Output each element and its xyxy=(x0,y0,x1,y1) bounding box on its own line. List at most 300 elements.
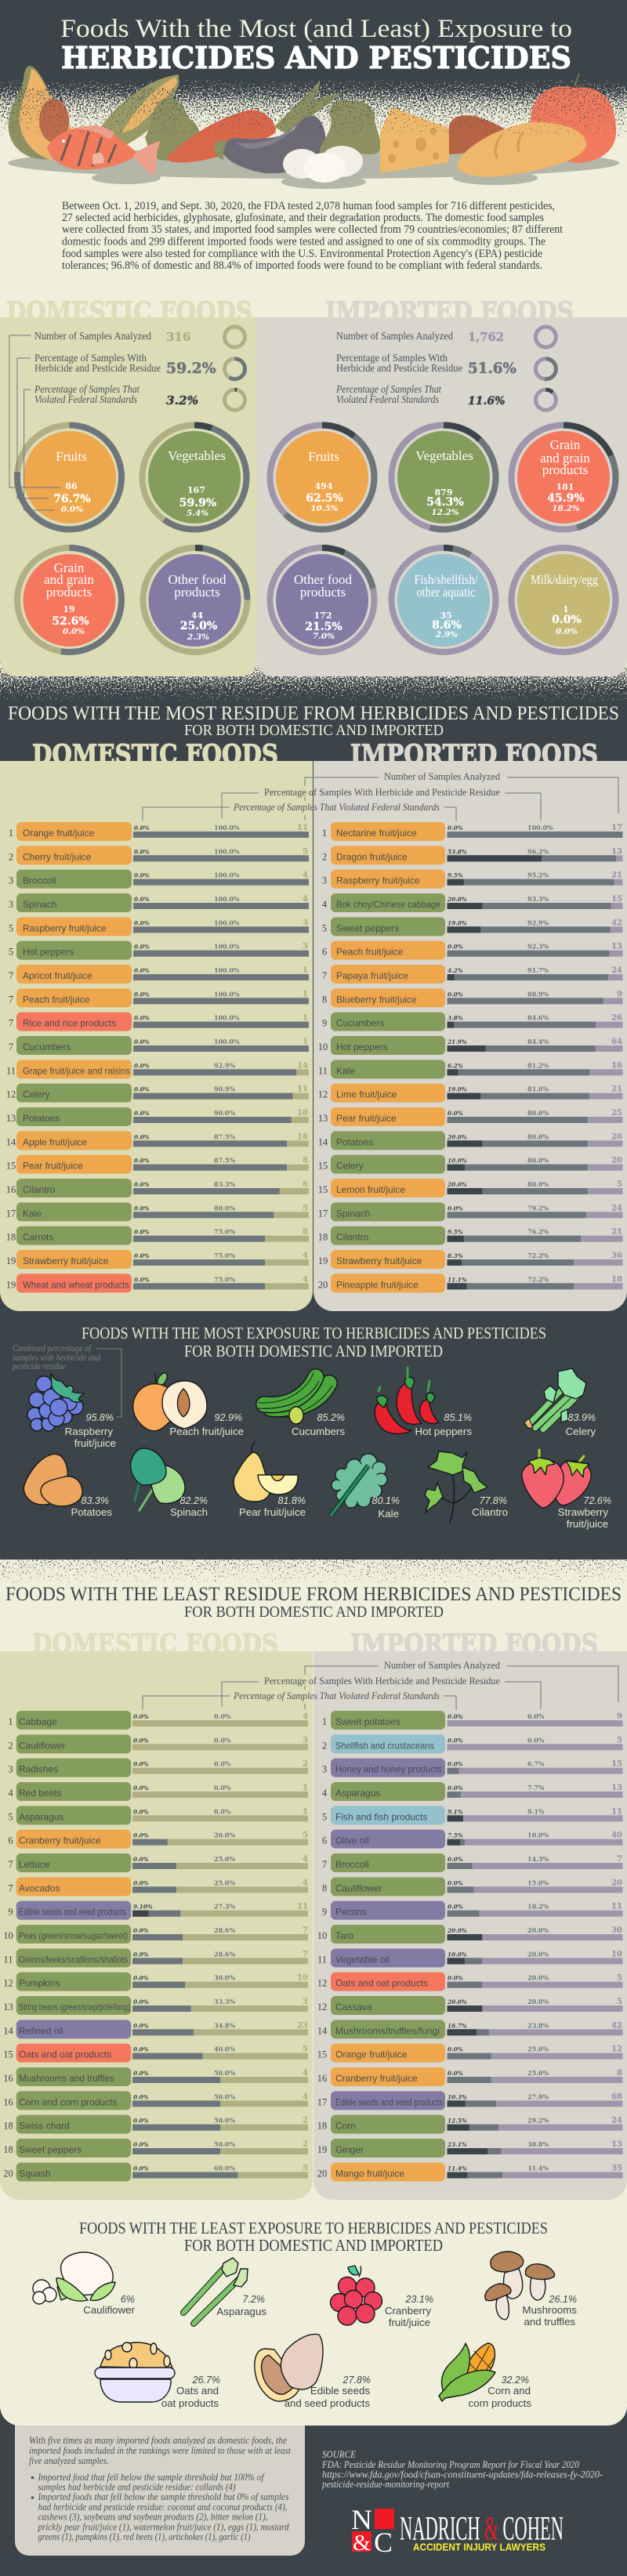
row: Asparagus: 0.0% xyxy=(448,1784,463,1792)
heading: most residue xyxy=(8,703,619,739)
row: Asparagus: 13 xyxy=(611,1784,622,1792)
row: Orange fruit/juice: 12 xyxy=(611,2045,622,2054)
row: Cassava: Cassava xyxy=(335,2002,372,2013)
row: Grape fruit/juice and raisins: 92.9% xyxy=(214,1061,235,1069)
row: Corn and corn products: 0.0% xyxy=(133,2093,149,2100)
row: Asparagus xyxy=(322,1782,622,1801)
item: asparagus xyxy=(183,2258,266,2324)
text block: notes: greens (1), pumpkins (1), red beets (1), artichokes (1), garlic (1) xyxy=(38,2531,251,2542)
row: Mushrooms and truffles: 50.0% xyxy=(214,2069,235,2077)
row: Cauliflower: Cauliflower xyxy=(335,1882,382,1893)
row: Hot peppers: Hot peppers xyxy=(23,947,74,958)
row: Cranberry fruit/juice xyxy=(317,2067,622,2086)
row: Corn: 24 xyxy=(611,2117,622,2125)
item: corn: corn products xyxy=(468,2397,531,2409)
table legend: least residue: Percentage of Samples With Herbicide and Pesticide Residue xyxy=(264,1675,500,1687)
row: Pear fruit/juice: 8 xyxy=(303,1157,308,1165)
row: Shellfish and crustaceans xyxy=(322,1734,622,1753)
panel: least residue domestic background xyxy=(0,1651,313,2200)
item: pear xyxy=(234,1442,306,1518)
row: Spinach: 3 xyxy=(9,899,13,910)
row: Cherry fruit/juice xyxy=(9,846,309,864)
row: Cilantro: 21 xyxy=(611,1228,622,1237)
row: Apricot fruit/juice: 1 xyxy=(303,966,308,975)
row: Cabbage: 0.0% xyxy=(133,1713,149,1720)
circle: imported grain: Grain xyxy=(550,437,581,452)
circle: domestic grain: 0.0% xyxy=(63,627,85,636)
row: Lettuce: 0.0% xyxy=(133,1856,149,1863)
row: Radishes: 0.0% xyxy=(133,1761,149,1768)
row: Sweet peppers: 0.0% xyxy=(133,2141,149,2148)
row: Raspberry fruit/juice: 3 xyxy=(303,918,308,927)
circle: imported vegetables xyxy=(392,425,495,530)
row: Mushrooms/truffles/fungi: 23.8% xyxy=(527,2021,549,2029)
item: asparagus: Asparagus xyxy=(216,2306,266,2317)
row: Cabbage: Cabbage xyxy=(19,1716,57,1727)
row: Cranberry fruit/juice: 8 xyxy=(617,2069,622,2078)
row: Carrots: 8 xyxy=(303,1228,308,1237)
row: Celery: 12 xyxy=(6,1089,16,1100)
row: Pear fruit/juice xyxy=(318,1107,622,1126)
item: potatoes xyxy=(24,1454,112,1518)
circle: imported other food xyxy=(270,548,375,652)
circle: imported vegetables: 879 xyxy=(435,487,452,498)
row: Oats and oat products: 5 xyxy=(617,1974,622,1983)
row: Pear fruit/juice: 0.0% xyxy=(134,1158,150,1165)
circle: imported milk: 1 xyxy=(563,604,569,614)
logo: Nadrich and Cohen: & xyxy=(353,2531,371,2556)
row: Lime fruit/juice: 19.0% xyxy=(448,1086,467,1093)
table: most residue domestic xyxy=(6,822,309,1292)
item: cauliflower: 6% xyxy=(121,2294,135,2305)
row: Carrots xyxy=(6,1226,309,1245)
circle: imported fish: 2.9% xyxy=(435,630,458,639)
row: Edible seeds and seed products: 27.3% xyxy=(214,1903,235,1911)
text block: source xyxy=(321,2449,603,2490)
row: Strawberry fruit/juice: 8.3% xyxy=(448,1252,463,1259)
row: Edible seeds and seed products: Edible seeds and seed products xyxy=(335,2096,443,2107)
icon: strawberry xyxy=(522,1450,591,1508)
row: Cilantro: 16 xyxy=(6,1184,16,1195)
row: Sweet peppers xyxy=(322,917,622,936)
row: Edible seeds and seed products: 68 xyxy=(611,2092,622,2101)
item: hot peppers xyxy=(375,1368,472,1437)
row: Bok choy/Chinese cabbage xyxy=(322,893,622,912)
row: Spinach: 4 xyxy=(303,895,308,904)
circle: imported grain: products xyxy=(542,462,588,477)
table legend: least residue: Percentage of Samples That Violated Federal Standards xyxy=(233,1690,440,1701)
grain transition to cream xyxy=(0,1560,627,1583)
row: Cauliflower: 8 xyxy=(322,1882,327,1893)
row: Taro xyxy=(317,1925,622,1944)
row: Cucumbers: 84.6% xyxy=(527,1014,549,1022)
row: Hot peppers: 5 xyxy=(9,947,13,958)
footer dark background xyxy=(0,2398,627,2576)
intro paragraph xyxy=(62,200,563,272)
item: raspberry: Raspberry xyxy=(65,1426,113,1437)
row: Carrots: 75.0% xyxy=(214,1228,235,1236)
row: Lettuce: 7 xyxy=(8,1859,13,1870)
row: Potatoes: 10 xyxy=(297,1109,308,1118)
row: Onions xyxy=(3,1948,308,1967)
row: Strawberry fruit/juice: Strawberry fruit/juice xyxy=(23,1255,109,1266)
row: Broccoli: Broccoli xyxy=(23,875,56,886)
row: Lettuce xyxy=(8,1853,308,1872)
row: Swiss chard: 0.0% xyxy=(133,2118,149,2125)
item: raspberry: fruit/juice xyxy=(74,1437,116,1449)
row: Hot peppers: 84.4% xyxy=(527,1038,549,1045)
row: Raspberry fruit/juice: 21 xyxy=(611,871,622,880)
row: Sweet potatoes: 0.0% xyxy=(527,1712,545,1720)
panel: notes box xyxy=(15,2398,305,2556)
row: Ginger: 13 xyxy=(611,2140,622,2149)
row: Broccoli xyxy=(9,870,309,889)
row: Orange fruit/juice: 11 xyxy=(297,824,308,832)
row: Sweet peppers: 2 xyxy=(303,2140,308,2149)
legend: imported samples with residue xyxy=(336,353,556,379)
row: Sweet potatoes: Sweet potatoes xyxy=(335,1716,400,1727)
row: Lime fruit/juice: Lime fruit/juice xyxy=(336,1089,397,1100)
row: Wheat and wheat products: Wheat and wheat products xyxy=(23,1279,129,1290)
heading: most exposure: FOODS WITH THE MOST EXPOSURE TO HERBICIDES AND PESTICIDES xyxy=(82,1324,546,1342)
row: Rice and rice products: 0.0% xyxy=(134,1015,150,1022)
item: cranberry: fruit/juice xyxy=(389,2317,430,2328)
table legend: most residue xyxy=(143,770,618,821)
row: Honey and honey products: 0.0% xyxy=(448,1761,463,1768)
row: Cauliflower: Cauliflower xyxy=(19,1740,65,1751)
circle: domestic grain: 19 xyxy=(63,604,75,614)
row: Oats and oat products: 5 xyxy=(303,2045,308,2054)
circle: domestic vegetables: 167 xyxy=(187,485,205,495)
row: Spinach xyxy=(9,893,309,912)
row: Carrots: 0.0% xyxy=(134,1229,150,1236)
row: Strawberry fruit/juice: 36 xyxy=(611,1252,622,1260)
row: Radishes: 2 xyxy=(303,1760,308,1769)
row: Lemon fruit/juice: 80.0% xyxy=(527,1180,549,1188)
row: Taro: 20.0% xyxy=(447,1927,467,1934)
row: Blueberry fruit/juice: 0.0% xyxy=(448,991,463,998)
row: Pecans xyxy=(322,1901,622,1920)
row: Cranberry fruit/juice: Cranberry fruit/juice xyxy=(335,2073,418,2084)
circle: imported other food: products xyxy=(300,585,346,600)
row: Wheat and wheat products xyxy=(6,1274,309,1292)
row: Asparagus: 0.0% xyxy=(133,1808,149,1815)
panel: domestic overview xyxy=(0,317,257,676)
heading: most exposure xyxy=(82,1324,546,1360)
row: Mango fruit/juice: 35 xyxy=(611,2165,622,2172)
row: Broccoli: 4 xyxy=(303,871,308,880)
row: Ginger: 30.8% xyxy=(527,2140,549,2148)
row: Sweet peppers: 50.0% xyxy=(214,2140,235,2148)
text block: notes: cashews (3), soybeans and soybean products (2), bitter melon (1), xyxy=(38,2511,268,2522)
row: Raspberry fruit/juice xyxy=(9,917,309,936)
circle: imported milk: 0.0% xyxy=(556,627,578,636)
row: Grape fruit/juice and raisins: Grape fruit/juice and raisins xyxy=(23,1065,130,1076)
row: Edible seeds and seed products: 10.3% xyxy=(448,2093,467,2100)
row: Lime fruit/juice: 81.0% xyxy=(527,1085,549,1093)
row: Edible seeds and seed products xyxy=(317,2091,622,2110)
row: Peach fruit/juice: 0.0% xyxy=(134,991,150,998)
item: cucumbers xyxy=(257,1373,345,1437)
row: Red beets: 0.0% xyxy=(133,1784,149,1792)
row: Blueberry fruit/juice: 88.9% xyxy=(527,990,549,998)
row: Squash: 60.0% xyxy=(214,2165,235,2172)
row: Celery: 90.9% xyxy=(214,1085,235,1093)
legend: imported samples violating standards: 11.6% xyxy=(468,395,505,408)
item: raspberry: 95.8% xyxy=(86,1412,114,1423)
row: Oats and oat products xyxy=(317,1973,622,1991)
item: celery: Celery xyxy=(566,1426,596,1437)
row: Dragon fruit/juice: 96.2% xyxy=(527,847,549,855)
row: Pineapple fruit/juice: Pineapple fruit/juice xyxy=(336,1279,419,1290)
icon: peach xyxy=(133,1371,207,1431)
row: Red beets: Red beets xyxy=(19,1788,62,1799)
row: Dragon fruit/juice: 53.8% xyxy=(448,848,467,855)
row: Onions: 0.0% xyxy=(133,1951,149,1958)
row: Pumpkins: 30.0% xyxy=(214,1974,235,1982)
row: Orange fruit/juice: 0.0% xyxy=(134,824,150,831)
circle: imported grain: and grain xyxy=(540,451,590,466)
row: Cauliflower: 0.0% xyxy=(214,1736,231,1744)
row: Apple fruit/juice xyxy=(6,1131,309,1150)
row: Ginger: 19 xyxy=(317,2144,327,2155)
row: Vegetable oil: Vegetable oil xyxy=(335,1954,390,1965)
row: Corn: 12.5% xyxy=(448,2118,467,2125)
row: Apricot fruit/juice: 100.0% xyxy=(214,966,240,974)
icon: oats xyxy=(95,2342,175,2402)
circle: imported fruits: Fruits xyxy=(308,449,339,464)
item: strawberry: 72.6% xyxy=(584,1495,611,1506)
item: strawberry: fruit/juice xyxy=(567,1518,608,1530)
row: Edible seeds and seed products: 11 xyxy=(297,1903,308,1911)
text block: notes: Imported food that fell below the sample threshold but 100% of xyxy=(38,2472,265,2483)
text block: source: pesticide-residue-monitoring-report xyxy=(321,2479,449,2490)
row: Swiss chard: 50.0% xyxy=(214,2117,235,2125)
row: Blueberry fruit/juice: Blueberry fruit/juice xyxy=(336,994,417,1005)
table: least residue imported xyxy=(317,1711,622,2182)
row: Cranberry fruit/juice: 5 xyxy=(303,1831,308,1840)
row: Wheat and wheat products: 0.0% xyxy=(134,1276,150,1283)
item: kale: Kale xyxy=(378,1508,399,1520)
row: Potatoes xyxy=(318,1131,622,1150)
table: most residue imported xyxy=(318,822,622,1292)
row: Oats and oat products: 20.0% xyxy=(527,1974,549,1982)
row: Fish and fish products: 9.1% xyxy=(527,1807,545,1815)
legend: domestic samples analyzed xyxy=(34,327,245,347)
row: Cucumbers xyxy=(322,1013,622,1031)
row: Shellfish and crustaceans: 2 xyxy=(322,1740,327,1751)
row: Sweet peppers: 5 xyxy=(322,922,327,933)
row: Mushrooms/truffles/fungi: 42 xyxy=(611,2021,622,2030)
circle: imported grain xyxy=(511,425,616,530)
row: Broccoli: 14.3% xyxy=(527,1855,549,1863)
row: Mushrooms and truffles: Mushrooms and truffles xyxy=(19,2073,114,2084)
item: cauliflower xyxy=(33,2252,136,2316)
row: Taro: 20.0% xyxy=(527,1926,549,1934)
icon: hot peppers xyxy=(375,1368,439,1434)
icon: kale xyxy=(331,1454,387,1516)
row: Cilantro: 9.5% xyxy=(448,1229,463,1236)
row: Edible seeds and seed products: 17 xyxy=(317,2096,327,2107)
row: Lime fruit/juice xyxy=(318,1084,622,1103)
row: Honey and honey products: Honey and honey products xyxy=(335,1764,442,1775)
panel: least residue imported background xyxy=(314,1651,627,2200)
row: Cabbage: 4 xyxy=(303,1712,308,1721)
row: Sweet peppers: 42 xyxy=(611,918,622,927)
row: Raspberry fruit/juice: 100.0% xyxy=(214,918,240,926)
row: Cranberry fruit/juice: Cranberry fruit/juice xyxy=(19,1835,101,1846)
row: Cilantro xyxy=(318,1226,622,1245)
row: String beans: 13 xyxy=(3,2002,13,2013)
text block: notes: had herbicide and pesticide residue: coconut and coconut products (4), xyxy=(38,2502,287,2513)
item: cucumbers: Cucumbers xyxy=(292,1426,345,1437)
intro paragraph: food samples were also tested for compliance with the U.S. Environmental Protection Agency's (EPA) pesticide xyxy=(62,248,542,260)
row: Hot peppers: 0.0% xyxy=(134,944,150,951)
row: Pineapple fruit/juice xyxy=(318,1274,622,1292)
row: Potatoes: Potatoes xyxy=(336,1136,373,1147)
row: Cucumbers: 26 xyxy=(611,1014,622,1023)
row: Mango fruit/juice: 11.4% xyxy=(448,2165,467,2172)
circle: imported other food: 7.0% xyxy=(313,632,335,641)
row: Vegetable oil: 10 xyxy=(611,1950,622,1958)
row: Cucumbers xyxy=(9,1036,309,1055)
legend: domestic samples analyzed: Number of Samples Analyzed xyxy=(34,331,151,342)
row: Orange fruit/juice: Orange fruit/juice xyxy=(23,828,95,839)
item: peach: Peach fruit/juice xyxy=(169,1426,244,1437)
row: Red beets: 4 xyxy=(8,1788,13,1799)
row: Raspberry fruit/juice: 3 xyxy=(322,875,327,886)
row: Ginger: 23.1% xyxy=(447,2141,467,2148)
text block: notes: samples had herbicide and pesticide residue: collards (4) xyxy=(38,2481,235,2492)
circle: imported fish: other aquatic xyxy=(417,585,476,600)
item: cilantro xyxy=(425,1451,508,1523)
circle: domestic grain xyxy=(17,548,121,652)
row: Corn: 18 xyxy=(317,2121,327,2132)
row: Edible seeds and seed products xyxy=(8,1901,308,1920)
row: Raspberry fruit/juice: Raspberry fruit/juice xyxy=(336,875,420,886)
row: String beans: String beans (green/snap/pole/long) xyxy=(19,2002,130,2013)
row: Peas: Peas (green/snow/sugar/sweet) xyxy=(19,1930,128,1941)
row: Honey and honey products: 15 xyxy=(611,1760,622,1769)
row: Red beets xyxy=(8,1782,308,1801)
legend: domestic samples with residue: Herbicide and Pesticide Residue xyxy=(34,363,161,375)
item: potatoes: Potatoes xyxy=(71,1506,112,1518)
item: edible seeds xyxy=(255,2334,371,2409)
table: least residue domestic xyxy=(3,1711,308,2182)
row: Cilantro: Cilantro xyxy=(336,1232,369,1243)
row: Sweet peppers: 92.9% xyxy=(527,918,549,926)
icon: asparagus xyxy=(183,2258,248,2324)
row: Orange fruit/juice: 1 xyxy=(9,828,13,839)
circle: imported milk xyxy=(511,548,616,652)
row: Kale: 0.0% xyxy=(134,1205,150,1212)
row: Raspberry fruit/juice xyxy=(322,870,622,889)
row: Cherry fruit/juice: Cherry fruit/juice xyxy=(23,851,92,862)
row: Cilantro: 6 xyxy=(303,1180,308,1189)
row: Potatoes: 13 xyxy=(6,1113,16,1124)
row: Swiss chard xyxy=(3,2115,308,2134)
legend: domestic samples with residue xyxy=(34,353,245,379)
row: Celery: Celery xyxy=(23,1089,50,1100)
item: cranberry: 23.1% xyxy=(405,2294,433,2305)
row: Asparagus: 1 xyxy=(303,1807,308,1816)
circle: imported fruits: 62.5% xyxy=(306,492,343,505)
row: Edible seeds and seed products: 27.9% xyxy=(527,2092,549,2100)
legend: domestic samples violating standards: Percentage of Samples That xyxy=(34,384,140,396)
row: Asparagus: 5 xyxy=(8,1811,13,1822)
circle: imported vegetables: Vegetables xyxy=(415,448,473,463)
intro paragraph: were collected from 35 states, and imported food samples were collected from 79 countries/economies; 87 different xyxy=(62,223,563,236)
row: Mushrooms and truffles: 0.0% xyxy=(133,2070,149,2077)
row: Celery: Celery xyxy=(336,1161,364,1172)
icon: celery xyxy=(524,1368,586,1429)
row: Strawberry fruit/juice: 19 xyxy=(318,1255,328,1266)
row: Olive oil: 40 xyxy=(611,1831,622,1840)
row: Dragon fruit/juice: 13 xyxy=(611,847,622,856)
item: cilantro: 77.8% xyxy=(480,1495,507,1506)
row: Fish and fish products xyxy=(322,1806,622,1824)
row: Peach fruit/juice: 92.3% xyxy=(527,943,549,951)
text block: source: FDA: Pesticide Residue Monitoring Program Report for Fiscal Year 2020 xyxy=(321,2459,580,2470)
circle: domestic grain: Grain xyxy=(54,560,85,575)
row: Vegetable oil: 10.0% xyxy=(448,1951,467,1958)
circle: domestic fruits: 86 xyxy=(65,481,78,491)
icon: pear xyxy=(234,1442,298,1502)
row: Cassava: 12 xyxy=(317,2002,327,2013)
circle: imported fruits: 494 xyxy=(315,481,333,491)
row: Cucumbers: 0.0% xyxy=(134,1038,150,1045)
row: Cranberry fruit/juice: 25.0% xyxy=(527,2069,549,2077)
row: Pecans: 0.0% xyxy=(448,1904,463,1911)
row: Carrots: Carrots xyxy=(23,1232,53,1243)
row: Celery xyxy=(318,1155,622,1174)
row: Broccoli: 7 xyxy=(322,1859,327,1870)
row: Apple fruit/juice: 16 xyxy=(297,1132,308,1141)
row: Squash: 20 xyxy=(3,2168,13,2179)
item: oats xyxy=(95,2342,220,2409)
circle: imported grain: 181 xyxy=(556,482,574,492)
row: Pumpkins: 10 xyxy=(297,1974,308,1983)
row: Hot peppers: 21.9% xyxy=(447,1038,467,1045)
row: Lemon fruit/juice: 5 xyxy=(617,1180,622,1189)
row: Potatoes: 14 xyxy=(318,1136,328,1147)
circle: imported fish xyxy=(392,548,495,652)
row: Corn and corn products xyxy=(3,2091,308,2110)
row: Cherry fruit/juice: 5 xyxy=(303,847,308,856)
item: celery: 83.9% xyxy=(568,1412,596,1423)
row: Spinach: 79.2% xyxy=(527,1204,549,1212)
row: Peas: 28.6% xyxy=(214,1926,235,1934)
legend: domestic samples violating standards: 3.2% xyxy=(166,393,198,408)
row: Blueberry fruit/juice: 9 xyxy=(617,990,622,998)
row: Kale: 5 xyxy=(303,1204,308,1212)
row: Pecans: 18.2% xyxy=(527,1903,549,1911)
row: Refined oil: 34.8% xyxy=(214,2021,235,2029)
legend: imported samples with residue: Percentage of Samples With xyxy=(336,353,448,364)
row: Cranberry fruit/juice: 0.0% xyxy=(133,1832,149,1839)
row: Peach fruit/juice xyxy=(322,941,622,960)
circle: domestic vegetables xyxy=(143,425,246,530)
row: Red beets: 1 xyxy=(303,1784,308,1792)
row: Cucumbers: Cucumbers xyxy=(336,1018,384,1029)
row: Rice and rice products: 100.0% xyxy=(214,1014,240,1022)
item: asparagus: 7.2% xyxy=(243,2294,265,2305)
row: Wheat and wheat products: 19 xyxy=(6,1279,16,1290)
row: Spinach: Spinach xyxy=(336,1208,370,1219)
circle: domestic other food: 25.0% xyxy=(180,620,217,632)
row: Avocados: Avocados xyxy=(19,1882,60,1893)
table legend: most residue: Number of Samples Analyzed xyxy=(384,770,500,782)
